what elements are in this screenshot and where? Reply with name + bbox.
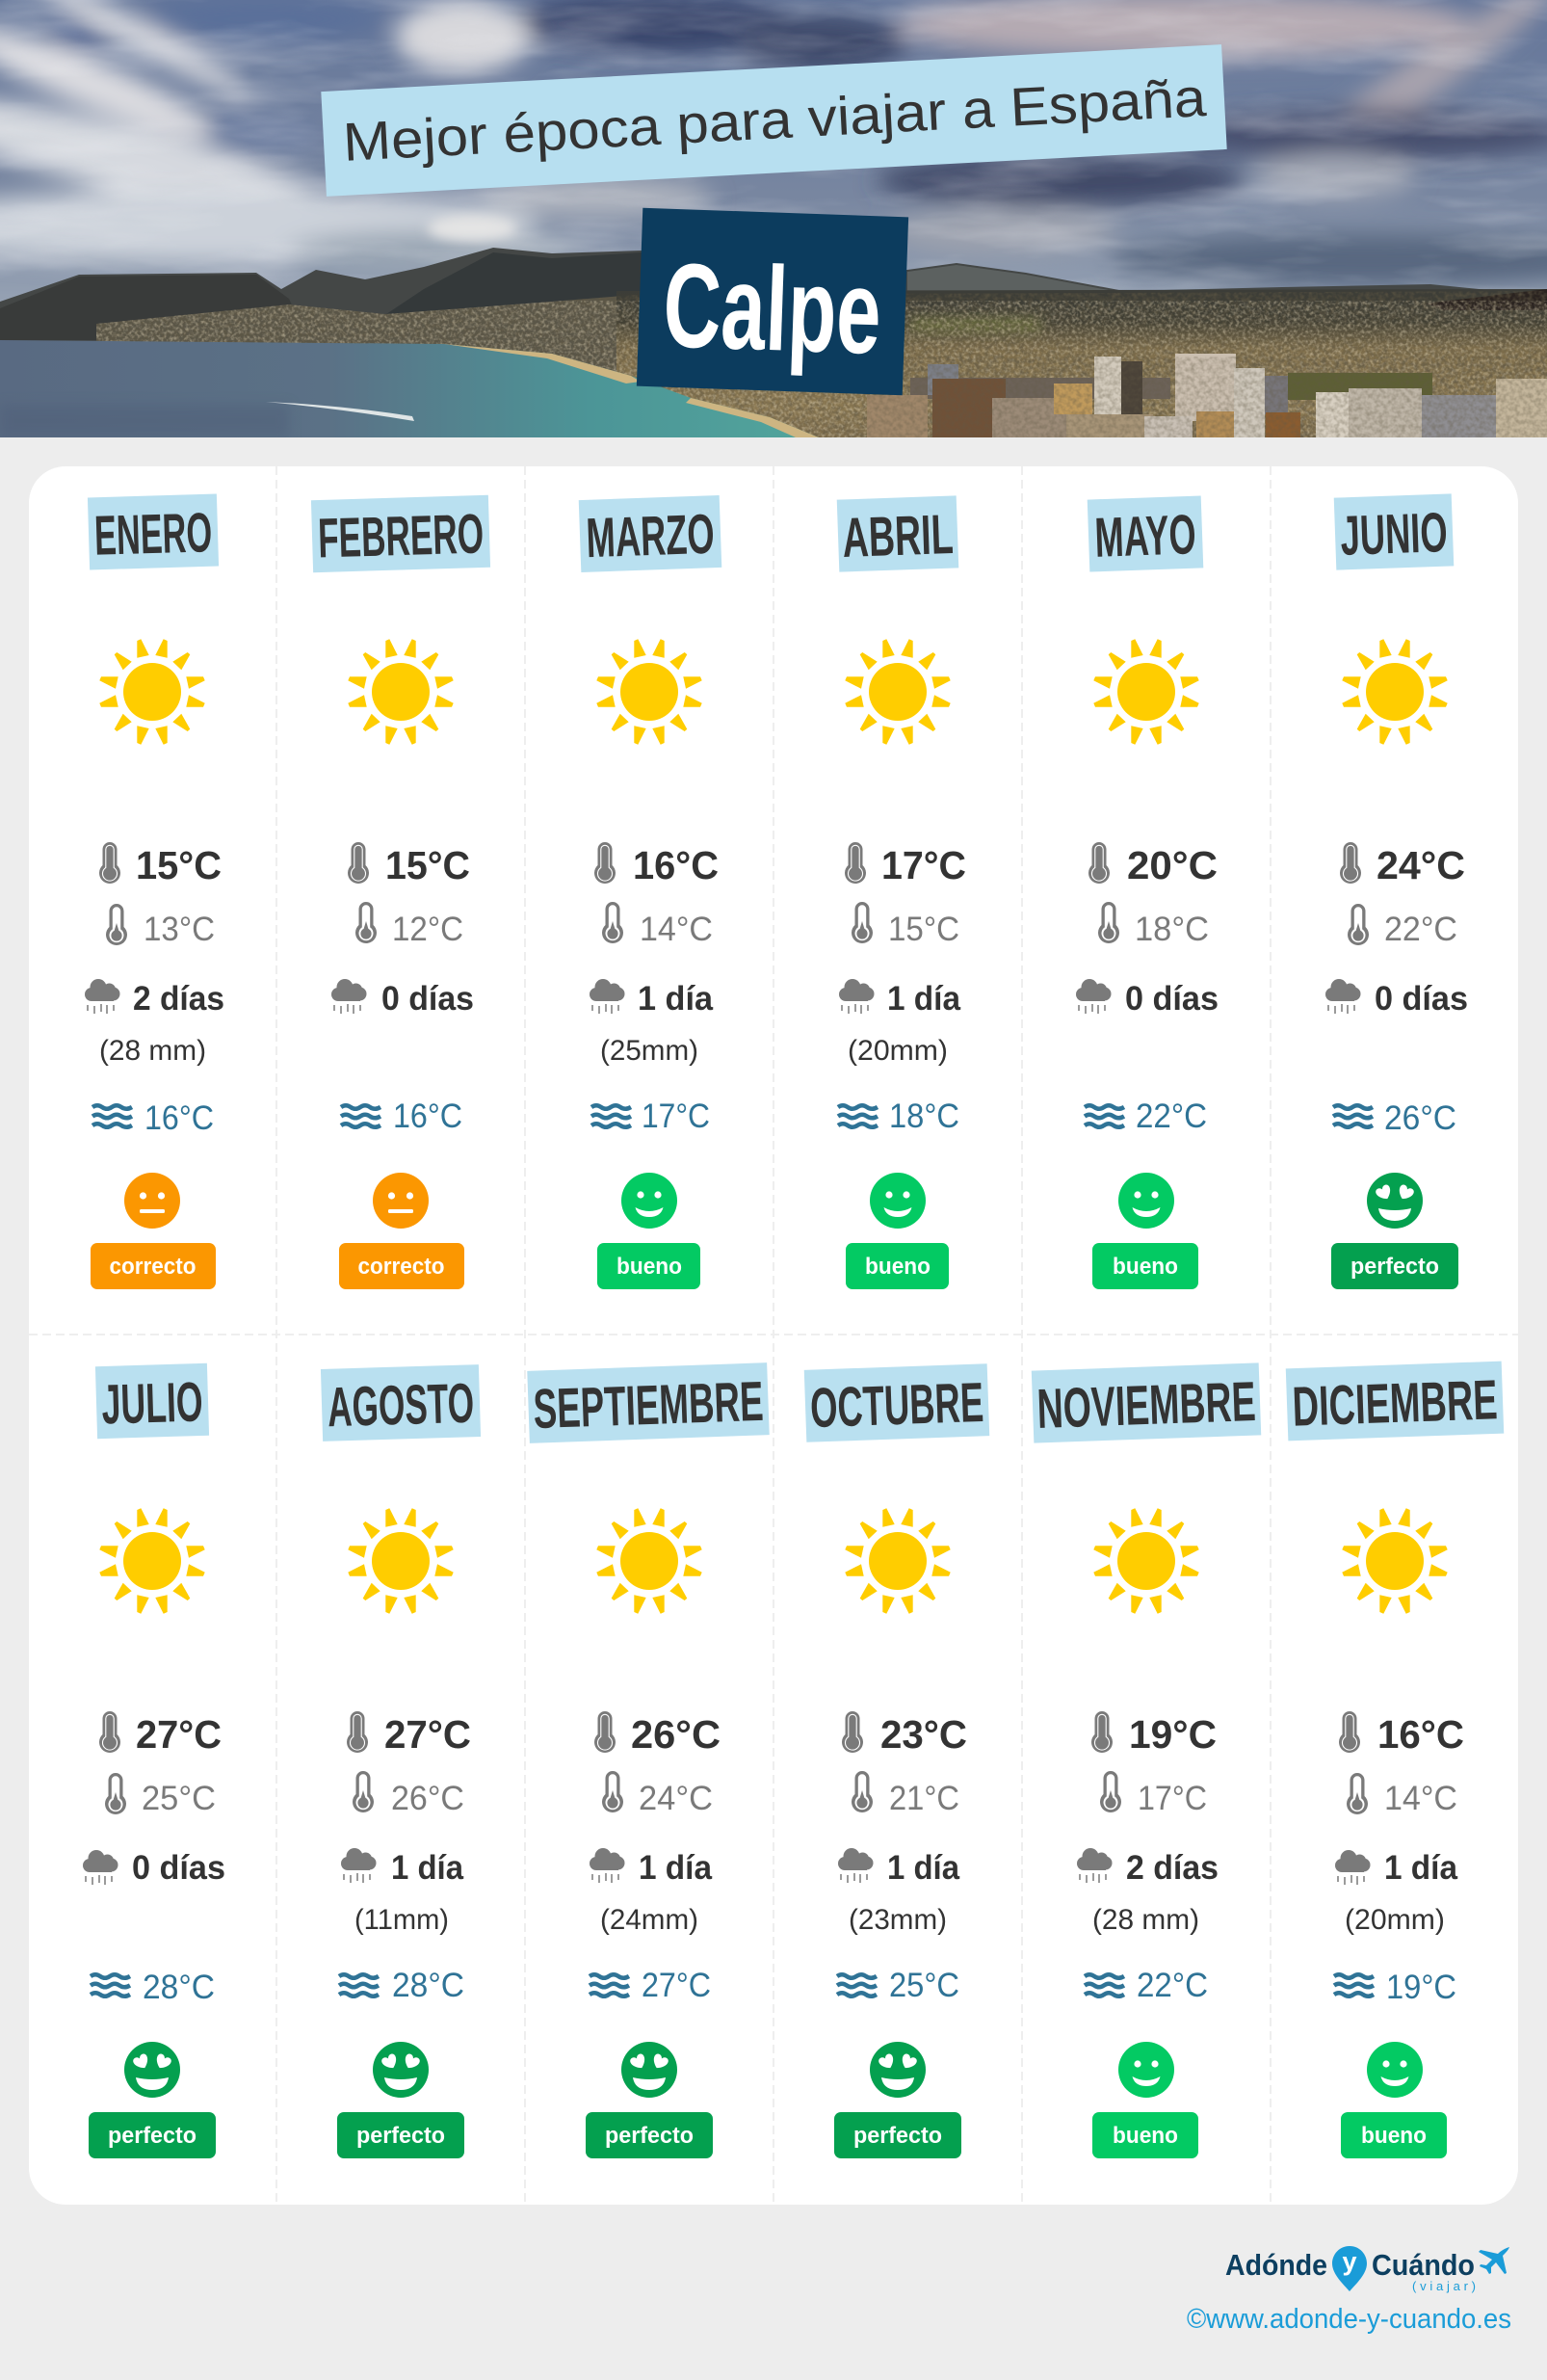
rating badge bbox=[1092, 2112, 1198, 2158]
rainy days bbox=[331, 979, 474, 1018]
min temperature bbox=[105, 1773, 216, 1817]
sea temperature: 25°C bbox=[889, 1967, 959, 2004]
rating badge: perfecto bbox=[1350, 1254, 1439, 1280]
lake and green bbox=[910, 378, 1170, 399]
rainy days bbox=[83, 1849, 225, 1887]
rating badge bbox=[89, 2112, 216, 2158]
sea temperature: 17°C bbox=[642, 1097, 710, 1135]
max temperature: 24°C bbox=[1377, 843, 1465, 887]
month label bbox=[579, 495, 721, 572]
rating badge bbox=[1331, 1243, 1458, 1289]
rainfall: (24mm) bbox=[600, 1904, 698, 1936]
min temperature bbox=[1100, 1771, 1207, 1817]
rainy days bbox=[590, 1848, 713, 1887]
month: mayo bbox=[1076, 495, 1219, 1289]
min temperature: 26°C bbox=[391, 1780, 464, 1817]
rating badge: bueno bbox=[616, 1254, 682, 1280]
month label bbox=[837, 495, 958, 572]
min temperature bbox=[1348, 904, 1457, 948]
max temperature: 27°C bbox=[136, 1712, 222, 1757]
sea temperature bbox=[1334, 1969, 1456, 2006]
rainfall: (28 mm) bbox=[1092, 1904, 1199, 1936]
rainy days bbox=[341, 1848, 463, 1887]
rating badge: bueno bbox=[1113, 2123, 1178, 2149]
buildings bbox=[867, 395, 928, 437]
month: febrero bbox=[311, 495, 490, 1289]
icon: heart-eyes face bbox=[124, 2042, 180, 2098]
sea temperature: 28°C bbox=[392, 1967, 464, 2004]
min temperature: 24°C bbox=[639, 1780, 713, 1817]
icon: happy face bbox=[1367, 2042, 1423, 2098]
icon: sun bbox=[1342, 639, 1448, 745]
rating badge bbox=[339, 1243, 464, 1289]
rating badge bbox=[597, 1243, 700, 1289]
rainfall: (20mm) bbox=[848, 1035, 948, 1067]
sea temperature bbox=[837, 1967, 959, 2004]
sea bbox=[0, 340, 819, 437]
icon: sun bbox=[1342, 1508, 1448, 1614]
month label bbox=[1334, 493, 1454, 570]
month label: ENERO bbox=[93, 501, 213, 568]
rainfall: (11mm) bbox=[354, 1904, 449, 1936]
city banner: Calpe bbox=[637, 208, 908, 395]
max temperature bbox=[348, 842, 470, 887]
month label: NOVIEMBRE bbox=[1036, 1370, 1257, 1441]
max temperature: 26°C bbox=[631, 1712, 721, 1757]
rating badge bbox=[337, 2112, 464, 2158]
icon: heart-eyes face bbox=[1367, 1173, 1423, 1229]
rainy days: 1 día bbox=[391, 1849, 463, 1887]
rainy days bbox=[838, 1848, 959, 1887]
rainy days bbox=[839, 979, 961, 1018]
icon: sun bbox=[845, 1508, 951, 1614]
min temperature bbox=[106, 904, 215, 948]
rainy days: 1 día bbox=[638, 980, 714, 1018]
min temperature: 25°C bbox=[142, 1780, 216, 1817]
rainy days: 0 días bbox=[1125, 980, 1219, 1018]
rainy days: 0 días bbox=[1375, 980, 1468, 1018]
max temperature: 19°C bbox=[1129, 1712, 1217, 1757]
sea temperature bbox=[838, 1097, 959, 1135]
max temperature bbox=[1088, 842, 1218, 887]
month label bbox=[321, 1364, 481, 1441]
icon: sun bbox=[596, 639, 702, 745]
month label: OCTUBRE bbox=[809, 1371, 984, 1440]
max temperature: 23°C bbox=[880, 1712, 967, 1757]
icon: map pin bbox=[1332, 2246, 1367, 2291]
footer logo: Adónde y Cuándo: Cuándo bbox=[1372, 2248, 1475, 2282]
icon: heart-eyes face bbox=[621, 2042, 677, 2098]
icon: sun bbox=[845, 639, 951, 745]
panel: monthly climate calendar bbox=[29, 466, 1518, 2205]
month label: JULIO bbox=[101, 1370, 204, 1437]
icon: happy face bbox=[1118, 2042, 1174, 2098]
month label: SEPTIEMBRE bbox=[533, 1370, 765, 1441]
max temperature: 20°C bbox=[1127, 843, 1218, 887]
month: agosto bbox=[321, 1364, 481, 2158]
sea temperature: 16°C bbox=[393, 1097, 462, 1135]
rating badge bbox=[846, 1243, 949, 1289]
city banner: Calpe: Calpe bbox=[661, 239, 883, 380]
rainfall: (25mm) bbox=[600, 1035, 698, 1067]
rainfall: (23mm) bbox=[849, 1904, 947, 1936]
min temperature: 12°C bbox=[392, 911, 463, 948]
sea temperature: 27°C bbox=[642, 1967, 711, 2004]
rating badge: perfecto bbox=[605, 2123, 694, 2149]
sea temperature bbox=[339, 1967, 464, 2004]
rainy days bbox=[1076, 979, 1219, 1018]
sea temperature bbox=[591, 1097, 710, 1135]
sea temperature bbox=[1333, 1099, 1456, 1137]
icon: sun bbox=[596, 1508, 702, 1614]
min temperature bbox=[852, 902, 959, 948]
min temperature bbox=[602, 1771, 713, 1817]
website credit: ©www.adonde-y-cuando.es bbox=[1187, 2304, 1511, 2335]
sea temperature bbox=[341, 1097, 462, 1135]
rating badge bbox=[1341, 2112, 1447, 2158]
rainy days bbox=[1325, 979, 1468, 1018]
rating badge bbox=[586, 2112, 713, 2158]
month label: MAYO bbox=[1093, 503, 1197, 569]
rating badge: bueno bbox=[865, 1254, 931, 1280]
icon: neutral face bbox=[373, 1173, 429, 1229]
rainfall: (20mm) bbox=[1345, 1904, 1445, 1936]
icon: heart-eyes face bbox=[373, 2042, 429, 2098]
sea temperature bbox=[1085, 1967, 1208, 2004]
icon: heart-eyes face bbox=[870, 2042, 926, 2098]
month label bbox=[804, 1363, 989, 1442]
sea temperature bbox=[590, 1967, 711, 2004]
month label bbox=[1032, 1362, 1261, 1443]
max temperature bbox=[594, 1711, 721, 1757]
max temperature: 16°C bbox=[633, 843, 719, 887]
month: enero bbox=[85, 494, 224, 1289]
icon: happy face bbox=[1118, 1173, 1174, 1229]
min temperature bbox=[355, 902, 463, 948]
sea temperature: 19°C bbox=[1386, 1969, 1456, 2006]
rating badge: bueno bbox=[1361, 2123, 1427, 2149]
icon: happy face bbox=[621, 1173, 677, 1229]
min temperature bbox=[602, 902, 713, 948]
footer logo: Adónde y Cuándo: (viajar) bbox=[1412, 2279, 1476, 2293]
sea temperature bbox=[1085, 1097, 1207, 1135]
month label bbox=[311, 495, 490, 572]
max temperature bbox=[1340, 842, 1465, 887]
max temperature bbox=[1091, 1711, 1217, 1757]
rainy days: 1 día bbox=[639, 1849, 713, 1887]
month: abril bbox=[837, 495, 966, 1289]
month: junio bbox=[1325, 493, 1468, 1289]
month label bbox=[88, 494, 219, 569]
rating badge bbox=[834, 2112, 961, 2158]
max temperature: 17°C bbox=[881, 843, 966, 887]
rating badge: perfecto bbox=[108, 2123, 197, 2149]
month label: MARZO bbox=[585, 503, 716, 569]
sea temperature: 28°C bbox=[143, 1969, 215, 2006]
min temperature bbox=[1347, 1773, 1457, 1817]
footer logo: Adónde y Cuándo bbox=[1225, 2246, 1509, 2293]
sea temperature: 22°C bbox=[1137, 1967, 1208, 2004]
min temperature: 14°C bbox=[640, 911, 713, 948]
icon: sun bbox=[99, 1508, 205, 1614]
icon: sun bbox=[348, 639, 454, 745]
icon: sun bbox=[1093, 1508, 1199, 1614]
min temperature: 15°C bbox=[888, 911, 959, 948]
max temperature bbox=[99, 842, 222, 887]
rainy days: 1 día bbox=[887, 980, 961, 1018]
min temperature: 17°C bbox=[1138, 1780, 1207, 1817]
title banner: Mejor época para viajar a España bbox=[321, 44, 1227, 197]
max temperature bbox=[347, 1711, 471, 1757]
month label bbox=[95, 1363, 209, 1439]
min temperature: 22°C bbox=[1384, 911, 1457, 948]
min temperature bbox=[353, 1771, 464, 1817]
max temperature: 27°C bbox=[384, 1712, 471, 1757]
month: diciembre bbox=[1286, 1362, 1504, 2158]
rating badge: correcto bbox=[358, 1254, 445, 1280]
month label bbox=[527, 1362, 770, 1443]
sea temperature bbox=[91, 1969, 215, 2006]
month: noviembre bbox=[1032, 1362, 1261, 2158]
max temperature: 15°C bbox=[136, 843, 222, 887]
rainy days bbox=[1077, 1848, 1219, 1887]
rainy days: 0 días bbox=[132, 1849, 225, 1887]
footer logo: Adónde y Cuándo: Adónde bbox=[1225, 2248, 1327, 2282]
month label: AGOSTO bbox=[327, 1372, 475, 1439]
rating badge: perfecto bbox=[356, 2123, 445, 2149]
rainy days: 2 días bbox=[1126, 1849, 1219, 1887]
min temperature: 13°C bbox=[144, 911, 215, 948]
icon: map pin: y bbox=[1342, 2247, 1357, 2276]
sea temperature bbox=[92, 1099, 214, 1137]
icon: sun bbox=[1093, 639, 1199, 745]
title banner: Mejor época para viajar a España: Mejor época para viajar a España bbox=[341, 66, 1208, 172]
rainy days: 1 día bbox=[887, 1849, 959, 1887]
max temperature bbox=[99, 1711, 222, 1757]
rating badge: perfecto bbox=[853, 2123, 942, 2149]
max temperature bbox=[594, 842, 719, 887]
town bbox=[96, 297, 616, 372]
rainy days: 1 día bbox=[1384, 1849, 1458, 1887]
max temperature bbox=[845, 842, 966, 887]
min temperature: 14°C bbox=[1384, 1780, 1457, 1817]
rainy days bbox=[590, 979, 714, 1018]
icon: happy face bbox=[870, 1173, 926, 1229]
sea temperature: 22°C bbox=[1136, 1097, 1207, 1135]
rainfall: (28 mm) bbox=[99, 1035, 206, 1067]
max temperature bbox=[1339, 1711, 1464, 1757]
min temperature bbox=[852, 1771, 959, 1817]
rainy days bbox=[1335, 1849, 1458, 1887]
sea temperature: 16°C bbox=[144, 1099, 214, 1137]
rainy days: 0 días bbox=[381, 980, 474, 1018]
min temperature: 18°C bbox=[1135, 911, 1209, 948]
max temperature: 16°C bbox=[1377, 1712, 1464, 1757]
max temperature bbox=[842, 1711, 967, 1757]
rating badge bbox=[91, 1243, 216, 1289]
rainy days: 2 días bbox=[133, 980, 224, 1018]
icon: sun bbox=[99, 639, 205, 745]
month label: JUNIO bbox=[1339, 501, 1449, 568]
rainy days bbox=[85, 979, 224, 1018]
month: octubre bbox=[804, 1363, 989, 2158]
sea temperature: 18°C bbox=[889, 1097, 959, 1135]
mountains bbox=[0, 248, 1547, 347]
min temperature: 21°C bbox=[889, 1780, 959, 1817]
rating badge: bueno bbox=[1113, 1254, 1178, 1280]
rating badge: correcto bbox=[110, 1254, 197, 1280]
header photo: Calpe coast bbox=[0, 0, 1547, 437]
icon: sun bbox=[348, 1508, 454, 1614]
month: septiembre bbox=[527, 1362, 770, 2158]
month label: FEBRERO bbox=[317, 502, 485, 570]
icon: airplane bbox=[1479, 2247, 1509, 2274]
month label: ABRIL bbox=[841, 503, 955, 569]
month label bbox=[1088, 495, 1203, 572]
month: julio bbox=[83, 1363, 225, 2158]
min temperature bbox=[1098, 902, 1209, 948]
icon: neutral face bbox=[124, 1173, 180, 1229]
rating badge bbox=[1092, 1243, 1198, 1289]
sea temperature: 26°C bbox=[1384, 1099, 1456, 1137]
max temperature: 15°C bbox=[385, 843, 470, 887]
month: marzo bbox=[579, 495, 721, 1289]
